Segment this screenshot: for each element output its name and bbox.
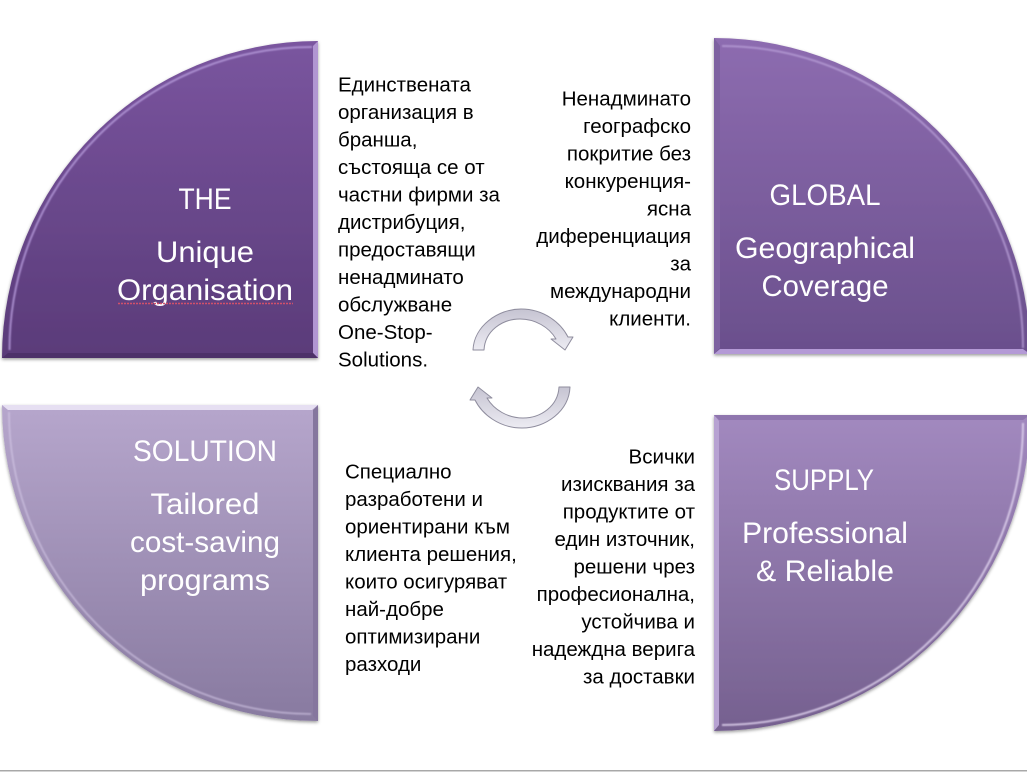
- heading: Geographical Coverage: Geographical: [735, 232, 915, 265]
- heading: Unique Organisation: Organisation: [117, 274, 293, 307]
- text block: bottom-left description: ориентирани към: [345, 516, 510, 539]
- text block: bottom-left description: клиента решения,: [345, 543, 517, 566]
- text block: top-left description: състояща се от: [338, 156, 485, 179]
- heading: Unique Organisation: Unique: [156, 236, 254, 269]
- panel: THE Unique Organisation: [2, 41, 318, 358]
- heading: GLOBAL: GLOBAL: [770, 179, 880, 212]
- text block: bottom-right description: продуктите от: [563, 501, 696, 524]
- text block: top-right description: географско: [583, 115, 691, 138]
- heading: Tailored cost-saving programs: programs: [140, 564, 270, 597]
- text block: bottom-left description: които осигуряват: [345, 571, 508, 594]
- heading: Unique Organisation: [117, 236, 293, 307]
- text block: bottom-right description: [532, 446, 696, 689]
- text block: top-right description: международни: [550, 280, 691, 303]
- text block: bottom-right description: за доставки: [583, 666, 695, 689]
- text block: top-right description: [536, 88, 692, 331]
- heading: Tailored cost-saving programs: Tailored: [150, 488, 260, 521]
- text block: top-right description: клиенти.: [609, 308, 691, 331]
- text block: bottom-left description: разработени и: [345, 488, 483, 511]
- text block: top-left description: One-Stop-: [338, 321, 433, 344]
- text block: top-right description: ясна: [647, 198, 692, 221]
- text block: top-left description: Единствената: [338, 74, 472, 97]
- text block: top-right description: диференциация: [536, 225, 691, 248]
- text block: top-left description: организация в: [338, 101, 474, 124]
- text block: bottom-left description: Специално: [345, 461, 452, 484]
- heading: SUPPLY: SUPPLY: [774, 464, 874, 497]
- text block: bottom-right description: надеждна верига: [532, 638, 696, 661]
- text block: top-left description: дистрибуция,: [338, 211, 465, 234]
- text block: top-left description: обслужване: [338, 294, 452, 317]
- text block: bottom-right description: един източник,: [555, 528, 695, 551]
- text block: bottom-left description: оптимизирани: [345, 626, 480, 649]
- heading: SOLUTION: SOLUTION: [133, 435, 277, 468]
- text block: top-right description: конкуренция-: [565, 170, 691, 193]
- text block: bottom-right description: решени чрез: [573, 556, 695, 579]
- heading: Professional & Reliable: [742, 517, 908, 588]
- heading: Geographical Coverage: Coverage: [762, 270, 888, 303]
- text block: top-right description: за: [670, 253, 692, 276]
- text block: bottom-left description: [345, 461, 517, 676]
- arrow: upper clockwise: [473, 309, 573, 350]
- heading: Professional & Reliable: Professional: [742, 517, 908, 550]
- text block: top-right description: Ненадминато: [562, 88, 691, 111]
- text block: top-left description: предоставящи: [338, 239, 476, 262]
- text block: top-left description: частни фирми за: [338, 184, 501, 207]
- text block: bottom-right description: професионална,: [537, 583, 695, 606]
- heading: Professional & Reliable: & Reliable: [756, 555, 894, 588]
- heading: Tailored cost-saving programs: [130, 488, 280, 597]
- heading: Tailored cost-saving programs: cost-saving: [130, 526, 280, 559]
- heading: Geographical Coverage: [735, 232, 915, 303]
- text block: top-left description: бранша,: [338, 129, 417, 152]
- panel: GLOBAL Geographical Coverage: [714, 38, 1027, 354]
- text block: top-left description: Solutions.: [338, 349, 428, 372]
- text block: bottom-right description: изисквания за: [561, 473, 696, 496]
- text block: top-left description: [338, 74, 501, 372]
- panel: SOLUTION Tailored cost-saving programs: [2, 405, 318, 721]
- icon: cycle arrows: [470, 309, 573, 428]
- heading: THE: THE: [178, 183, 232, 216]
- text block: bottom-left description: най-добре: [345, 598, 444, 621]
- arrow: lower counter-clockwise: [470, 387, 570, 428]
- text block: bottom-left description: разходи: [345, 653, 421, 676]
- text block: bottom-right description: Всички: [629, 446, 695, 469]
- footer rule: [0, 770, 1027, 772]
- text block: bottom-right description: устойчива и: [581, 611, 695, 634]
- text block: top-right description: покритие без: [567, 143, 691, 166]
- panel: SUPPLY Professional & Reliable: [714, 415, 1027, 731]
- text block: top-left description: ненадминато: [338, 266, 464, 289]
